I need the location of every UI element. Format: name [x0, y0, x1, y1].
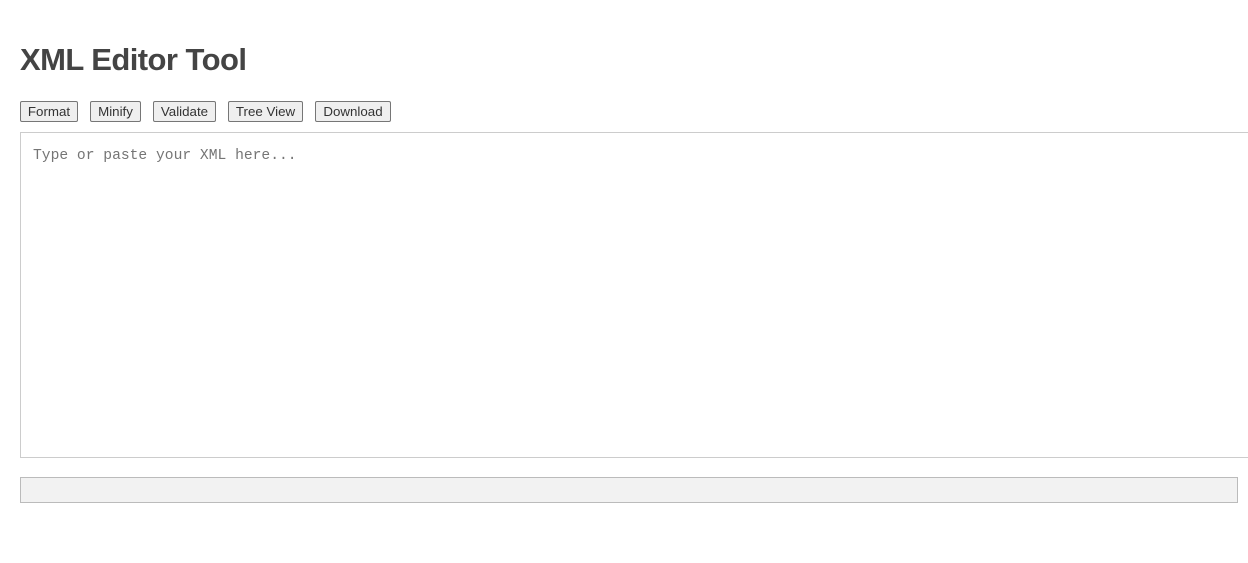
button: tree view [228, 101, 303, 122]
button: minify [90, 101, 141, 122]
editor textarea [20, 132, 1248, 458]
button: minify: Minify [98, 104, 133, 119]
button: download: Download [323, 104, 383, 119]
output panel [20, 477, 1238, 503]
button: tree view: Tree View [236, 104, 295, 119]
button: validate [153, 101, 216, 122]
toolbar [20, 101, 391, 122]
button: download [315, 101, 391, 122]
title: XML Editor Tool [20, 42, 246, 77]
button: format [20, 101, 78, 122]
button: format: Format [28, 104, 70, 119]
button: validate: Validate [161, 104, 208, 119]
placeholder text: Type or paste your XML here... [33, 148, 297, 164]
